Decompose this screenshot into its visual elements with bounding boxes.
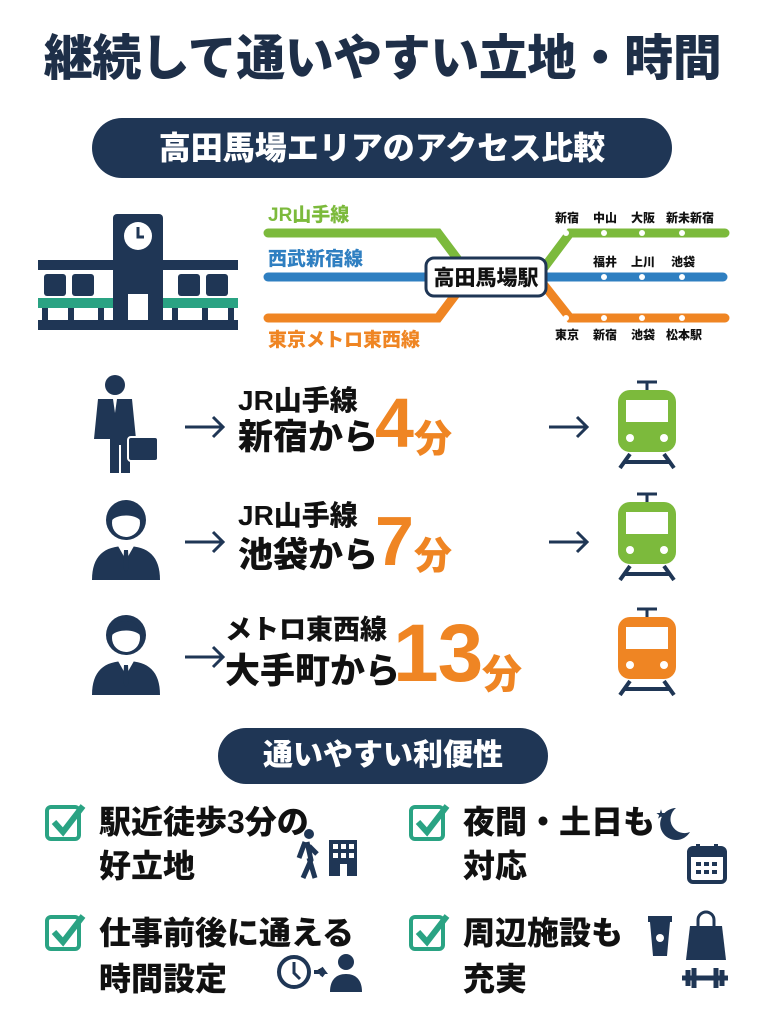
arrow [549, 416, 589, 438]
icon: clock to person [277, 954, 362, 992]
banner: access comparison [92, 118, 672, 178]
line map: 大阪 [631, 210, 655, 225]
item: night and weekend: 夜間・土日も [463, 804, 655, 840]
row 1: Shinjuku 4 min: 新宿から [238, 418, 378, 457]
row 2: Ikebukuro 7 min: 7 [375, 502, 414, 580]
row 2: Ikebukuro 7 min: 池袋から [238, 536, 378, 575]
text: route: メトロ東西線 [225, 615, 387, 645]
row 1: Shinjuku 4 min: 分 [414, 419, 452, 461]
row 2: Ikebukuro 7 min: 分 [414, 536, 452, 578]
row 2: Ikebukuro 7 min [92, 492, 676, 582]
row 3: Otemachi 13 min: 13 [393, 608, 482, 699]
line map: 上川 [631, 255, 655, 269]
icon: calendar [687, 844, 727, 884]
item: nearby facilities [409, 910, 728, 997]
item: before/after work [45, 914, 362, 997]
icon: check [409, 914, 450, 951]
arrow [185, 646, 225, 668]
row 3: Otemachi 13 min: 分 [482, 653, 522, 697]
row 1: Shinjuku 4 min: 4 [375, 384, 414, 462]
line map: 高田馬場駅 [434, 266, 538, 290]
banner: access comparison: 高田馬場エリアのアクセス比較 [159, 130, 605, 166]
line map: 中山 [593, 210, 617, 225]
icon: walker and building [296, 829, 357, 879]
line map: 福井 [593, 254, 617, 269]
icon: cup, bag, dumbbell [648, 910, 728, 988]
row 3: Otemachi 13 min: 大手町から [225, 652, 400, 691]
icon: green train [618, 492, 676, 582]
icon: green train [618, 380, 676, 470]
icon: check [45, 914, 86, 951]
icon: moon: ★ [656, 809, 666, 821]
line map: 西武新宿線 [268, 247, 363, 270]
arrow [185, 531, 225, 553]
item: before/after work: 仕事前後に通える [99, 915, 354, 951]
line map: 新宿 [555, 210, 579, 225]
arrow [549, 531, 589, 553]
title: 継続して通いやすい立地・時間 [44, 32, 721, 86]
line map: 松本駅 [666, 327, 702, 342]
arrow [185, 416, 225, 438]
banner: convenience [218, 728, 548, 784]
icon: businessman with briefcase [94, 375, 157, 473]
line map: 新未新宿 [666, 210, 714, 225]
line map [264, 203, 730, 350]
item: nearby facilities: 周辺施設も [463, 915, 623, 951]
item: station walk: 好立地 [99, 848, 195, 884]
item: before/after work: 時間設定 [99, 961, 227, 997]
line map: JR山手線 [268, 203, 349, 226]
item: nearby facilities: 充実 [463, 961, 527, 997]
banner: convenience: 通いやすい利便性 [263, 739, 503, 772]
line map: 池袋 [671, 254, 695, 269]
item: station walk: 駅近徒歩3分の [99, 804, 309, 840]
text: route: JR山手線 [238, 385, 358, 416]
text: route: JR山手線 [238, 500, 358, 531]
item: night and weekend [409, 804, 727, 884]
icon: check [409, 804, 450, 841]
row 3: Otemachi 13 min [92, 608, 676, 699]
icon: check [45, 804, 86, 841]
line map: 東京 [555, 327, 579, 342]
line map: 池袋 [631, 327, 655, 342]
icon: station building [38, 214, 238, 330]
item: station walk [45, 804, 357, 884]
icon: businessman bust [92, 500, 160, 580]
item: night and weekend: 対応 [463, 848, 527, 884]
line map: 新宿 [593, 327, 617, 342]
icon: businessman bust [92, 615, 160, 695]
icon: orange train [618, 608, 676, 696]
row 1: Shinjuku 4 min [94, 375, 676, 473]
icon: moon [656, 808, 690, 840]
